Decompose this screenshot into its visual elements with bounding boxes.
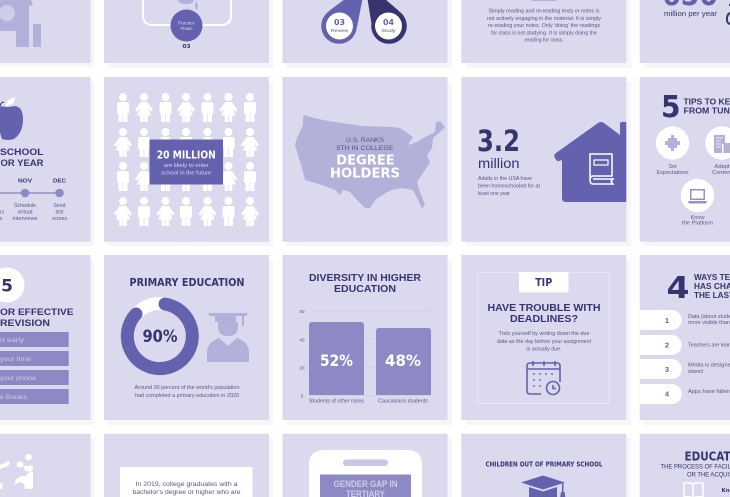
body text: for class is not studying. It is simply doing the	[491, 30, 597, 36]
body text: not actively engaging in the material. It is simply	[487, 16, 602, 22]
list text: Apps have fallen	[688, 389, 730, 395]
panel: review and study	[282, 0, 448, 63]
heading	[694, 272, 730, 300]
icon: puzzle	[665, 135, 680, 151]
tip labels	[0, 337, 36, 401]
body text	[497, 331, 591, 352]
bar chart: 60	[299, 309, 305, 314]
bar chart: 0	[301, 394, 304, 398]
panel: school building	[0, 0, 90, 63]
tip labels: Know	[690, 215, 705, 221]
icon: graduate	[207, 313, 249, 362]
body text: Simply reading and re-reading texts or notes is	[488, 8, 600, 14]
bar chart: 48%	[385, 351, 421, 370]
card text: In 2019, college graduates with a	[136, 481, 238, 488]
panel: education definition	[640, 434, 730, 497]
bar chart: Caucasians students	[378, 398, 428, 404]
unit: million	[478, 155, 520, 171]
callout: 20 million: school in the future	[161, 170, 211, 176]
heading: DEADLINES?	[510, 313, 578, 325]
tip labels: Set	[668, 164, 677, 170]
panel: gender gap phone	[282, 434, 448, 497]
description: least one year	[478, 191, 510, 197]
description: Adults in the USA have	[478, 176, 532, 182]
pill numbers: 4	[665, 390, 670, 398]
partial glyph	[727, 5, 730, 24]
icon: open book	[684, 483, 703, 497]
body text: reading for class.	[524, 38, 564, 44]
timeline labels: scores	[52, 216, 68, 222]
heading	[0, 307, 74, 329]
step number: 03	[182, 44, 191, 50]
timeline labels	[0, 203, 68, 222]
cycle outline	[143, 0, 231, 25]
icon: laptop	[688, 189, 707, 204]
card text	[132, 481, 241, 496]
tip labels: e Breaks	[0, 394, 28, 401]
icon: content	[714, 135, 730, 153]
definition	[660, 464, 730, 478]
title	[309, 272, 421, 295]
tip circles	[656, 126, 730, 212]
big number: 3.2	[477, 124, 520, 158]
bar chart: 20	[299, 366, 305, 370]
number badge	[0, 268, 24, 302]
bar chart: 52%	[320, 351, 353, 370]
pill numbers: 1	[665, 316, 669, 325]
phone screen	[320, 474, 411, 497]
phone speaker	[343, 460, 388, 466]
months: DEC	[53, 178, 66, 184]
big four: 4	[666, 271, 690, 306]
title: CHILDREN OUT OF PRIMARY SCHOOL	[486, 460, 603, 468]
timeline	[0, 189, 64, 197]
pin: review: Review	[331, 28, 349, 34]
practice phase circle: Practice	[178, 20, 196, 26]
months: NOV	[18, 178, 32, 184]
donut chart	[127, 304, 192, 369]
body text: is actually due.	[526, 346, 562, 352]
body text: Trick yourself by writing down the due	[498, 331, 590, 337]
pin: review: 03	[334, 18, 345, 27]
description: been homeschooled for at	[478, 184, 540, 190]
heading	[488, 302, 600, 325]
pin: study	[368, 0, 407, 44]
caption	[134, 385, 240, 399]
months	[18, 178, 66, 184]
pill numbers: 2	[665, 340, 669, 350]
pin: study: 04	[383, 18, 394, 27]
caption: million per year	[664, 9, 718, 18]
pill numbers: 3	[665, 365, 669, 374]
bar chart: 40	[299, 338, 305, 342]
frame	[478, 272, 609, 403]
panel: 4 ways	[640, 255, 730, 420]
screen title: GENDER GAP IN	[334, 479, 398, 489]
callout: 20 million	[150, 140, 223, 184]
tip tag	[519, 272, 568, 292]
tip labels: rt early	[0, 337, 25, 344]
tip labels	[656, 164, 730, 226]
tip labels: your phone	[0, 375, 36, 382]
body text: date as the day before your assignment	[497, 339, 591, 345]
timeline labels: Schedule	[14, 203, 36, 209]
timeline labels: rs	[0, 210, 5, 216]
panel: practice phase	[104, 0, 269, 63]
bar chart: Students of other races	[309, 398, 364, 404]
panel: re-reading text	[461, 0, 626, 63]
number badge: 5	[1, 276, 13, 296]
panel: group silhouette	[0, 434, 90, 497]
timeline labels: virtual	[18, 210, 32, 216]
caption: had completed a primary education in 2020	[135, 393, 239, 399]
panel: school year timeline	[0, 77, 90, 242]
tip labels: your time	[0, 356, 31, 363]
list text: shared	[688, 369, 703, 375]
panel: deadline tip	[461, 255, 626, 420]
description	[478, 176, 540, 197]
list text: Media is designed	[688, 362, 730, 368]
big five: 5	[661, 90, 680, 125]
card text: bachelor's degree or higher who are	[132, 489, 241, 496]
bar chart	[299, 309, 431, 404]
timeline labels: Send	[54, 203, 66, 209]
practice phase circle	[170, 10, 202, 42]
panel: children out of school	[461, 434, 626, 497]
icon: school building	[0, 0, 41, 47]
heading	[684, 96, 730, 116]
pill numbers	[665, 316, 670, 398]
map text: DEGREE	[336, 154, 395, 168]
practice phase circle: Phase	[180, 26, 193, 31]
panel: diversity chart	[282, 255, 448, 420]
tip tag: TIP	[535, 277, 552, 289]
highlight pill	[531, 0, 557, 1]
icon: apple	[0, 97, 23, 140]
timeline labels: interviews	[12, 216, 38, 222]
tip labels: Expectations	[656, 170, 689, 176]
panel: million per year	[640, 0, 730, 63]
donut chart: 90%	[142, 327, 178, 347]
map text: HOLDERS	[330, 166, 400, 182]
heading: OR EFFECTIVE	[0, 307, 74, 318]
icon: small figure	[178, 0, 198, 10]
pictogram: people	[114, 93, 259, 226]
panel: 20 million people	[104, 77, 269, 242]
title: OR YEAR	[0, 158, 44, 169]
screen title	[334, 479, 398, 497]
callout: 20 million: are likely to enter	[164, 163, 209, 169]
panel: effective revision	[0, 255, 90, 420]
icon: house with book	[554, 122, 626, 202]
body text: re-reading your notes. Only 'doing' the readings	[488, 23, 601, 29]
number pills	[640, 310, 682, 404]
map text: U.S. RANKS	[346, 137, 385, 144]
list text	[688, 314, 730, 395]
map: USA	[295, 115, 445, 208]
title	[0, 147, 44, 169]
panel: 5 tips	[640, 77, 730, 242]
panel: homeschool	[461, 77, 626, 242]
tip bars	[0, 332, 69, 404]
list text: more visible than	[688, 320, 730, 326]
panel: primary education	[104, 255, 269, 420]
timeline labels: test	[56, 210, 64, 216]
title: DIVERSITY IN HIGHER	[309, 272, 421, 284]
heading: REVISION	[0, 318, 50, 329]
map text	[330, 137, 400, 182]
title: SCHOOL	[0, 147, 44, 158]
heading: HAVE TROUBLE WITH	[488, 302, 600, 314]
pin: review	[321, 0, 362, 44]
phone body	[309, 450, 422, 497]
title: EDUCATION	[334, 283, 396, 295]
map text: 5TH IN COLLEGE	[336, 145, 394, 152]
pin: study: Study	[382, 28, 396, 34]
caption: Around 90 percent of the world's population	[134, 385, 240, 391]
panel: college graduates	[104, 434, 269, 497]
callout: 20 million: 20 MILLION	[157, 150, 216, 162]
title: PRIMARY EDUCATION	[130, 277, 244, 289]
tip labels: Adapt	[714, 164, 730, 170]
icon: calendar	[527, 361, 560, 394]
icon: graduation cap	[521, 476, 566, 497]
panel: degree holders map	[282, 77, 448, 242]
label: Kn	[722, 488, 730, 494]
body text	[487, 8, 602, 44]
icon: people group	[0, 454, 33, 489]
white card	[120, 467, 252, 497]
tip labels: the Platform	[682, 220, 714, 226]
